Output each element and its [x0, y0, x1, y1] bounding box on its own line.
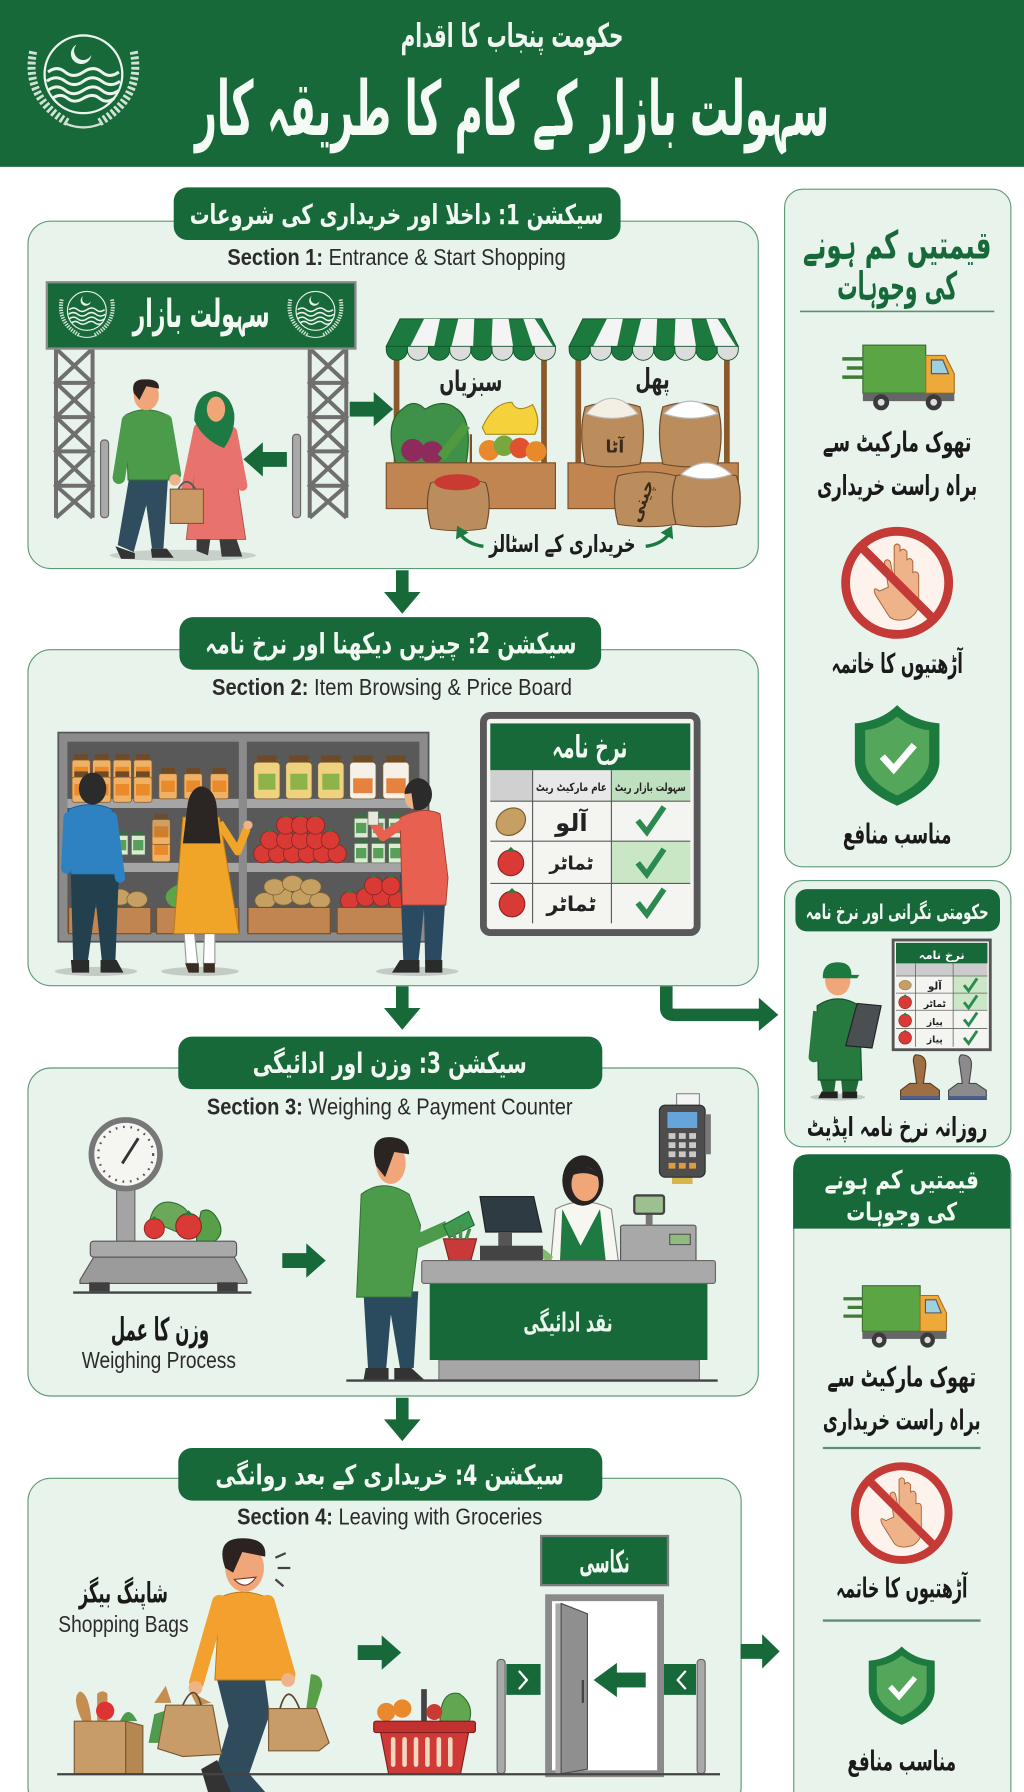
icon: shield [855, 705, 939, 806]
label: shopping bags: شاپنگ بیگز [78, 1575, 168, 1609]
exit sign: نکاسی [579, 1545, 630, 1581]
stall: vegetables [386, 319, 555, 531]
panel: section 3 [28, 1037, 758, 1396]
heading: section 4 English: Section 4: Leaving with Groceries [237, 1504, 542, 1530]
mini price board: پیاز [926, 1018, 943, 1028]
header banner [0, 0, 1024, 167]
mini price board: پیاز [926, 1035, 943, 1045]
entrance gate [47, 282, 355, 518]
heading: section 3 Urdu: سیکشن 3: وزن اور ادائیگی [253, 1046, 527, 1080]
figure: government officer [810, 962, 881, 1101]
figure: customer paying [357, 1137, 474, 1381]
grocery basket [374, 1689, 475, 1774]
icon: stamps [901, 1055, 986, 1099]
payment counter [346, 1261, 718, 1381]
mini price board: ٹماٹر [923, 1000, 946, 1010]
label: weighing process [82, 1311, 236, 1373]
stall caption with arrows [456, 526, 673, 558]
figure: man in blue shirt [55, 773, 137, 976]
price board: عام مارکیٹ ریٹ [536, 780, 607, 794]
arrow: section 3 to 4 [384, 1398, 421, 1441]
arrow: section 2 to government monitoring [666, 986, 778, 1031]
shopping bag left hand [149, 1686, 222, 1757]
text: direct from wholesale [817, 427, 977, 502]
panel title [803, 223, 991, 309]
panel: section 4 [28, 1448, 741, 1792]
panel: government monitoring [785, 881, 1011, 1147]
arrow: to stalls [350, 392, 393, 426]
shopping bags on floor [74, 1691, 143, 1774]
text: fair profit: مناسب منافع [847, 1746, 956, 1777]
stall: fruit and staples: پھل [635, 362, 670, 396]
payment counter: نقد ادائیگی [523, 1307, 613, 1338]
stall: fruit and staples: آٹا [605, 436, 625, 458]
arrow: to basket [358, 1635, 401, 1670]
arrow: into bazaar [243, 442, 287, 477]
price board: سہولت بازار ریٹ [615, 780, 686, 795]
heading: section 1 Urdu: سیکشن 1: داخلا اور خریداری کی شروعات [190, 200, 603, 231]
panel header: کی وجوہات [846, 1198, 957, 1228]
weighing scale [73, 1120, 251, 1293]
price board [483, 715, 697, 933]
subtitle: حکومت پنجاب کا اقدام [401, 16, 623, 56]
arrow: through exit [594, 1663, 646, 1697]
stall: fruit and staples: چینی [625, 477, 659, 525]
text: fair profit: مناسب منافع [843, 819, 951, 850]
exit sign [541, 1536, 668, 1585]
arrow: section 1 to 2 [384, 570, 421, 614]
panel header [793, 1154, 1010, 1229]
price board header [490, 723, 690, 770]
panel: why prices are lower (lower) [793, 1154, 1011, 1792]
panel header: قیمتیں کم ہونے [825, 1166, 979, 1196]
arrow: scale to counter [282, 1243, 326, 1278]
label: shopping bags: Shopping Bags [58, 1611, 189, 1637]
icon: no middlemen [855, 1466, 949, 1560]
icon: truck [842, 345, 954, 410]
heading: section 2 Urdu: سیکشن 2: چیزیں دیکھنا اور نرخ نامہ [205, 627, 577, 661]
price board header: نرخ نامہ [552, 730, 627, 766]
label: weighing process: وزن کا عمل [111, 1311, 209, 1349]
card payment terminal [659, 1094, 711, 1184]
exit gate posts with flags [497, 1659, 705, 1774]
heading: section 1 English: Section 1: Entrance & Start Shopping [227, 244, 566, 270]
heading: monitoring [795, 889, 1000, 931]
entrance gate: سہولت بازار [131, 292, 270, 338]
stall: vegetables: سبزیاں [439, 364, 502, 398]
stall caption with arrows: خریداری کے اسٹالز [488, 530, 635, 558]
icon: no middlemen [846, 531, 949, 634]
plant pot [443, 1224, 477, 1261]
shopping bag right hand [269, 1674, 329, 1751]
figure: happy man carrying bags [189, 1538, 295, 1792]
mini price board: نرخ نامہ [919, 948, 965, 962]
price board: ٹماٹر [548, 854, 594, 875]
heading: section 2 Urdu [179, 617, 601, 670]
mini price board [893, 940, 990, 1050]
icon: shield [869, 1646, 935, 1725]
figure: man in red shirt [368, 778, 458, 976]
panel: section 1 [28, 187, 758, 569]
computer monitor [480, 1197, 543, 1262]
panel: why prices are lower [785, 189, 1011, 867]
heading: section 2 English: Section 2: Item Browsing & Price Board [212, 674, 572, 700]
mini price board: آلو [927, 980, 942, 993]
icon: truck [843, 1286, 946, 1348]
arrow: section 2 to 3 [384, 986, 421, 1030]
heading: section 1 Urdu [174, 187, 621, 240]
exit door [549, 1598, 661, 1774]
icon: Punjab government emblem [32, 35, 135, 127]
heading: section 3 Urdu [178, 1037, 602, 1089]
heading: section 4 Urdu: سیکشن 4: خریداری کے بعد روانگی [215, 1460, 564, 1492]
figure: cashier [533, 1155, 618, 1262]
stall: fruit and staples [568, 319, 740, 527]
figure: woman in hijab with shopping bag [170, 391, 246, 557]
heading: section 4 Urdu [178, 1448, 602, 1501]
label: shopping bags [58, 1575, 189, 1637]
figure: woman in yellow kurta [161, 786, 253, 976]
cash register [621, 1195, 696, 1264]
grocery shelves [58, 733, 429, 942]
price board: آلو [554, 808, 588, 837]
figure: man walking [110, 379, 256, 561]
label: weighing process: Weighing Process [82, 1347, 236, 1373]
text: direct from wholesale [823, 1362, 981, 1437]
price board: ٹماٹر [546, 892, 596, 916]
panel: section 2 [28, 617, 758, 986]
heading: section 3 English: Section 3: Weighing & Payment Counter [207, 1093, 573, 1119]
arrow: section 4 to price reasons [741, 1634, 780, 1669]
